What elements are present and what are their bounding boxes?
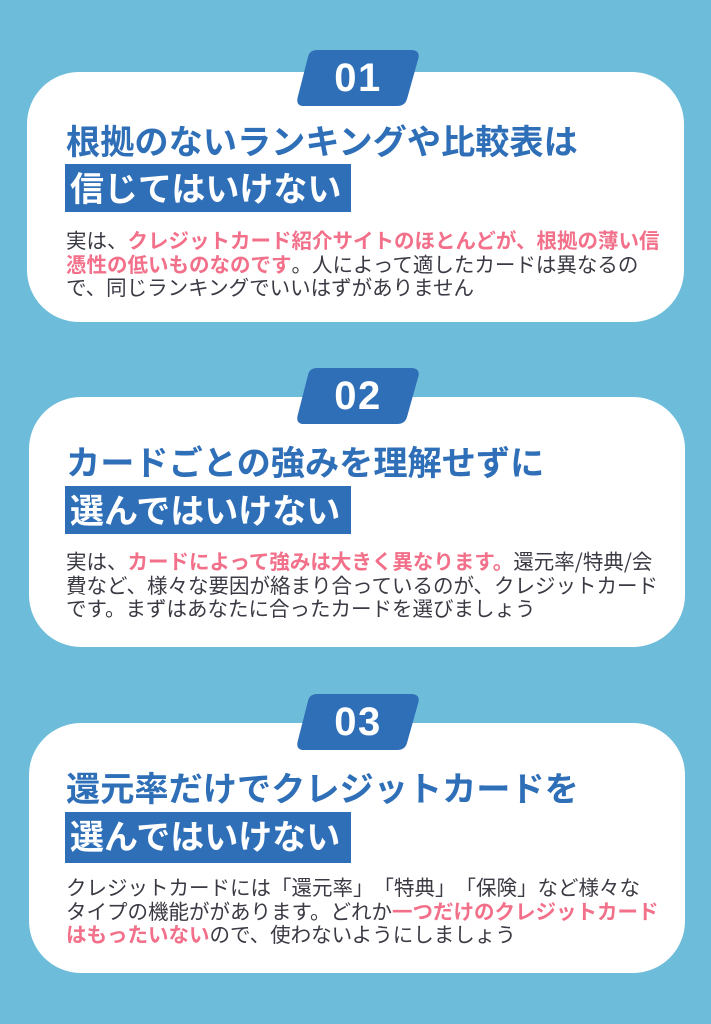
- text block: card 2 body: です。まずはあなたに合ったカードを選びましょう: [66, 592, 535, 622]
- text block: card 1 body: [66, 224, 659, 301]
- badge: number 01: 01: [334, 56, 382, 100]
- badge: number 02: [297, 368, 419, 424]
- panel: card 2 background: [29, 397, 685, 647]
- badge: number 01: [297, 50, 419, 106]
- panel: card 3 background: [29, 723, 685, 973]
- heading: card 2 line 1: カードごとの強みを理解せずに: [66, 435, 544, 485]
- text block: card 2 body: [66, 545, 658, 622]
- badge: number 03: 03: [334, 700, 382, 744]
- text block: card 2 body: 費など、様々な要因が絡まり合っているのが、クレジットカード: [66, 569, 658, 599]
- heading: card 1 highlighted line: 信じてはいけない: [70, 162, 341, 211]
- panel: card 1 background: [27, 72, 684, 322]
- heading: card 3 highlighted line: 選んではいけない: [70, 810, 340, 859]
- heading: card 3 line 1: 還元率だけでクレジットカードを: [66, 761, 579, 811]
- heading: card 1 line 1: 根拠のないランキングや比較表は: [66, 114, 578, 164]
- heading: card 2 highlighted line: 選んではいけない: [70, 484, 340, 533]
- text block: card 3 body: クレジットカードには「還元率」「特典」「保険」など様々な: [66, 871, 640, 901]
- text block: card 3 body: はもったいないので、使わないようにしましょう: [66, 918, 516, 948]
- text block: card 1 body: 憑性の低いものなのです。人によって適したカードは異なるの: [66, 248, 638, 278]
- badge: number 03: [297, 694, 419, 750]
- badge: number 02: 02: [334, 374, 382, 418]
- text block: card 3 body: [66, 871, 658, 948]
- text block: card 2 body: 実は、カードによって強みは大きく異なります。還元率/特典/会: [66, 545, 652, 575]
- text block: card 1 body: 実は、クレジットカード紹介サイトのほとんどが、根拠の薄い信: [66, 224, 659, 254]
- text block: card 3 body: タイプの機能ががあります。どれか一つだけのクレジットカード: [66, 895, 658, 925]
- text block: card 1 body: で、同じランキングでいいはずがありません: [66, 271, 474, 301]
